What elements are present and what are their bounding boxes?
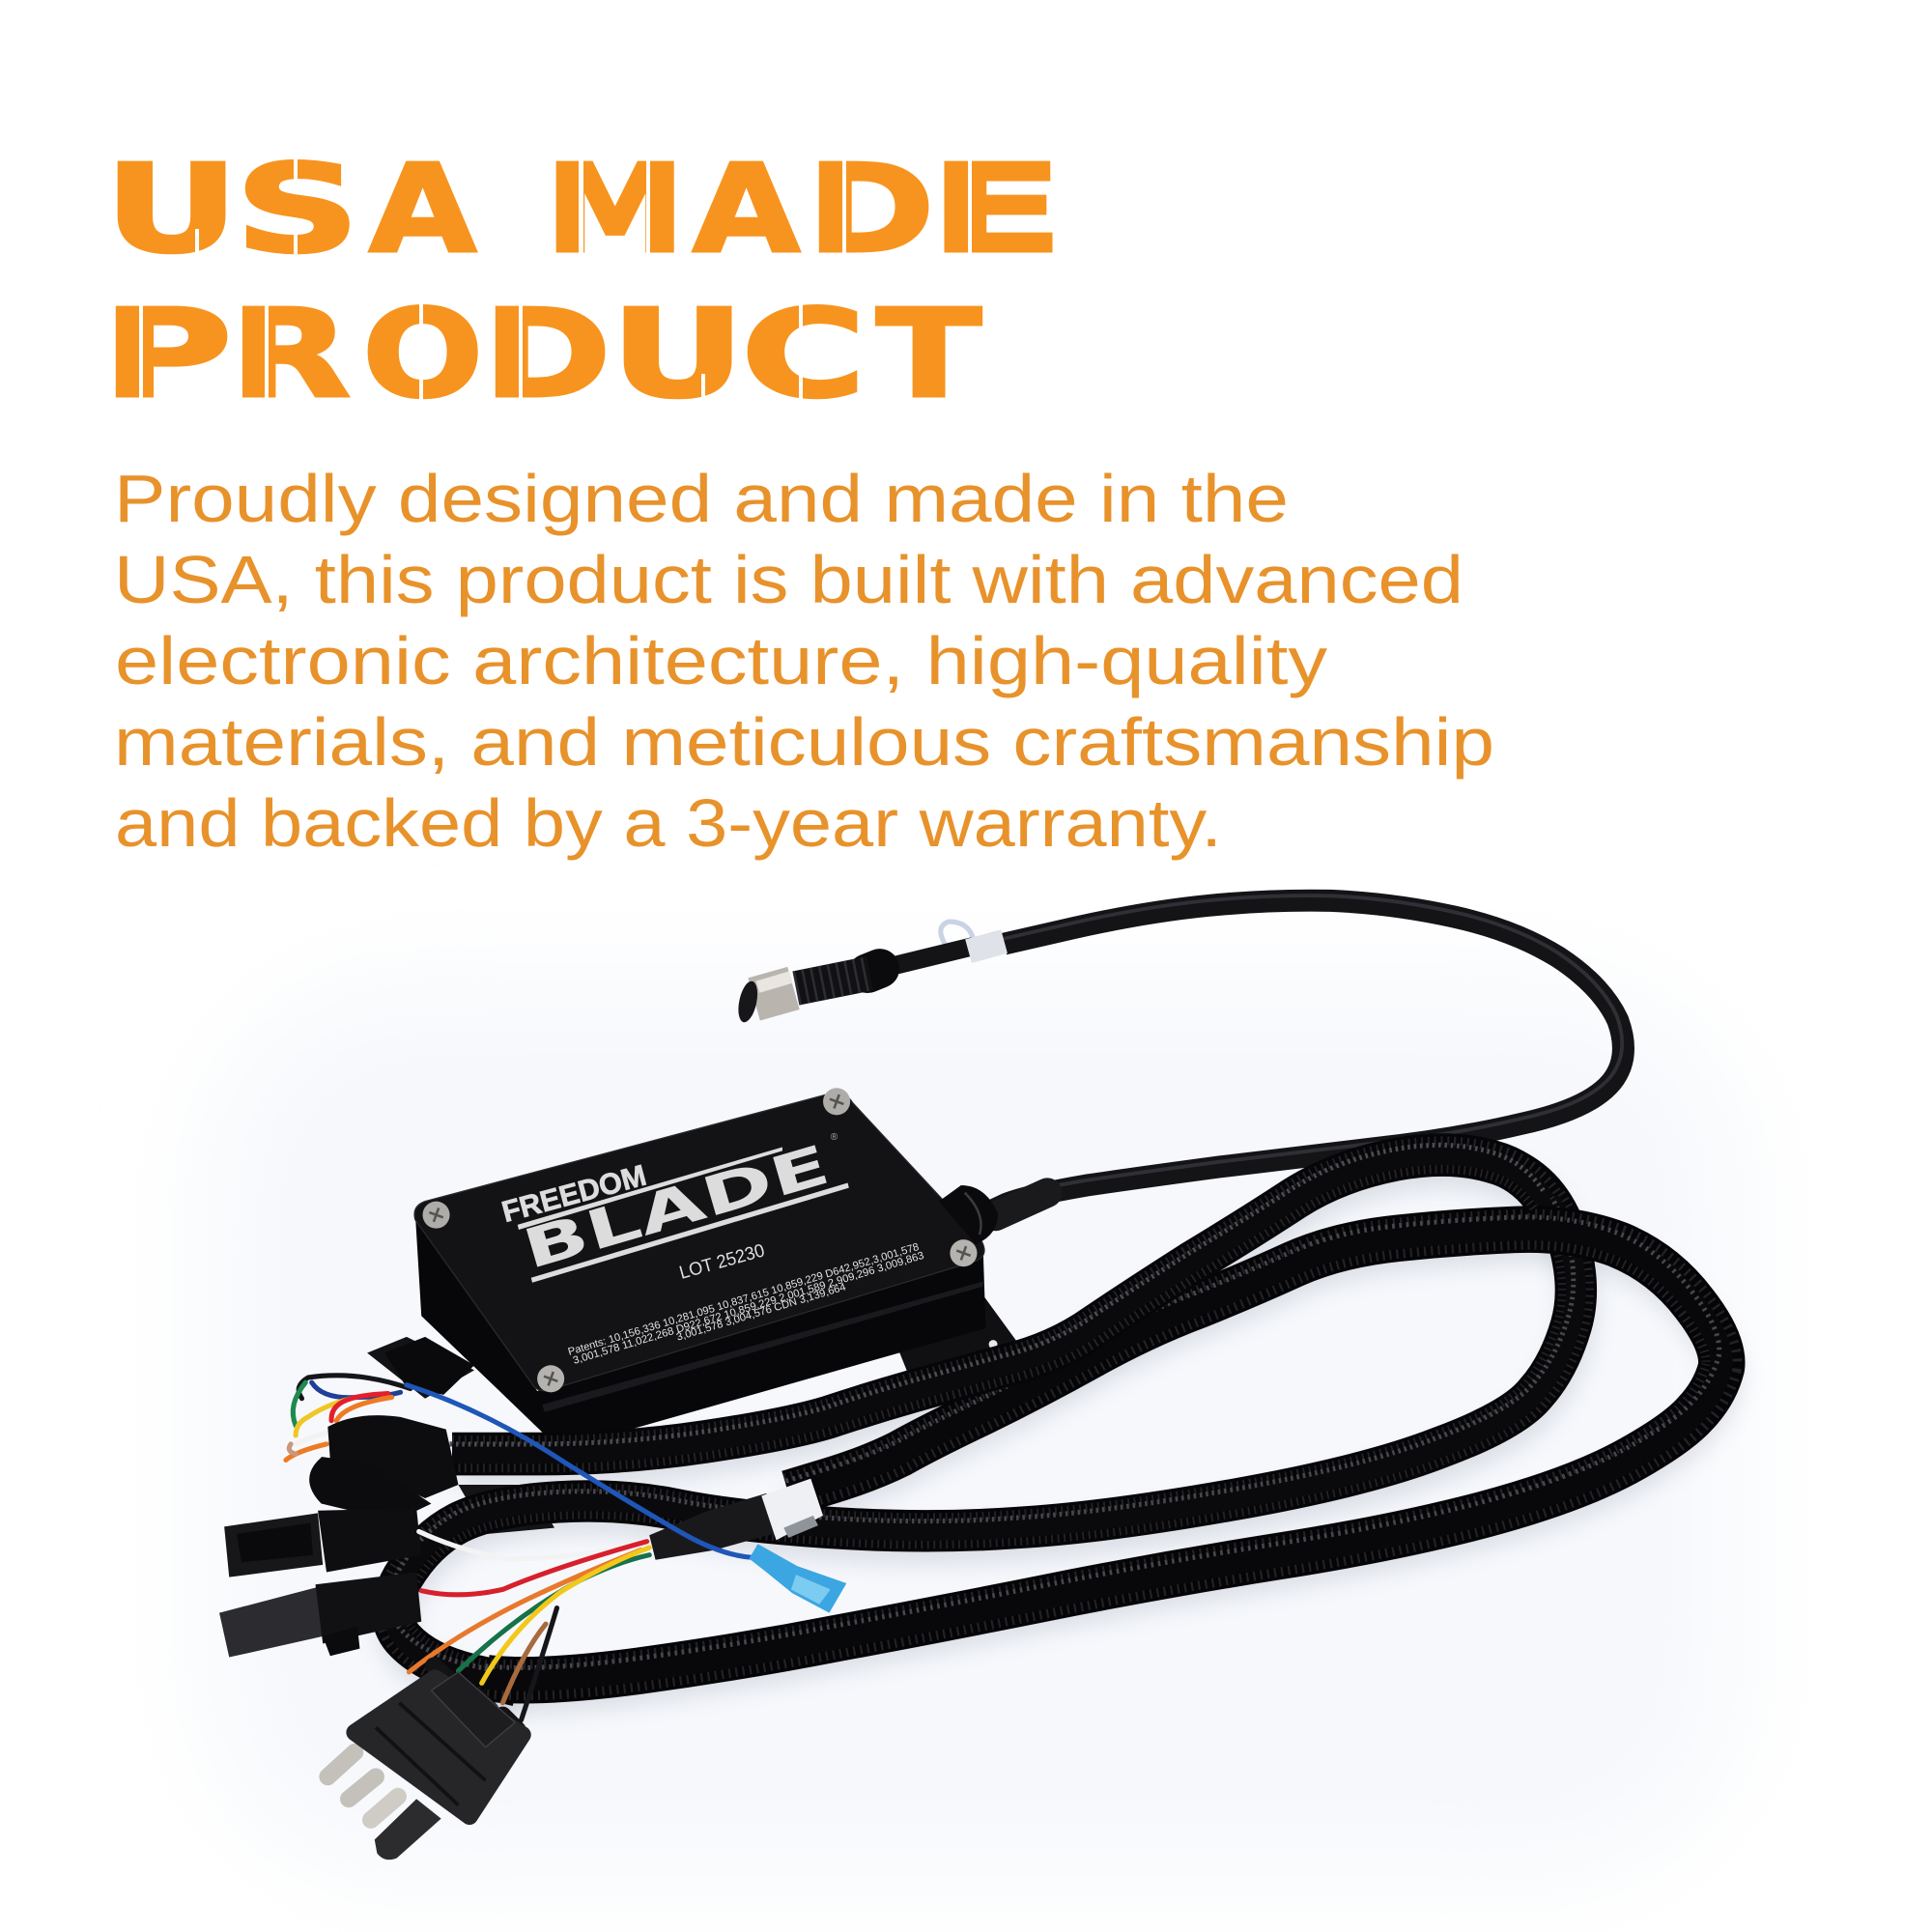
logo: Freedom Blade xyxy=(498,1132,849,1283)
heading line 1: A xyxy=(693,138,800,280)
heading line 2: C xyxy=(741,283,866,425)
heading line 1 xyxy=(104,138,1065,280)
body paragraph xyxy=(114,461,1494,861)
body paragraph: electronic architecture, high-quality xyxy=(115,623,1327,698)
screws xyxy=(423,1088,977,1392)
wire fan to harness xyxy=(409,1531,649,1720)
heading line 2: U xyxy=(611,283,745,425)
silver collar xyxy=(754,988,793,999)
body paragraph: Proudly designed and made in the xyxy=(114,461,1289,536)
wire nubs xyxy=(434,1665,518,1730)
metal pins xyxy=(327,1752,398,1820)
logo: Freedom Blade: BLADE xyxy=(516,1134,837,1282)
black enclosure xyxy=(384,1088,1047,1444)
logo: Freedom Blade: FREEDOM xyxy=(498,1159,650,1229)
coloured wires at connector cluster xyxy=(286,1376,411,1460)
heading line 2: T xyxy=(876,283,981,425)
heading line 1: S xyxy=(235,138,360,280)
silver band xyxy=(969,941,1005,952)
heading line 2: P xyxy=(101,283,233,425)
heading line 1: D xyxy=(807,138,935,280)
left cable gland xyxy=(384,1337,474,1395)
corrugated harness: large loop xyxy=(484,1217,1721,1680)
heading line 2: D xyxy=(483,283,611,425)
logo: Freedom Blade: ® xyxy=(831,1132,838,1143)
black heat-shrink boot xyxy=(327,1415,458,1498)
lot number: LOT 25230 xyxy=(677,1240,767,1284)
two black pigtail connectors xyxy=(219,1508,421,1658)
patent numbers: 3,001,578 11,022,268 D922,672 10,859,229 2,001,589 2,909,296 3,009,863 xyxy=(572,1250,925,1367)
heading line 1: E xyxy=(928,138,1065,280)
heading line 2 xyxy=(101,283,983,425)
heading line 1: U xyxy=(104,138,239,280)
connector: upper xyxy=(224,1508,421,1577)
heading line 2: O xyxy=(362,283,483,425)
heading line 1: A xyxy=(369,138,476,280)
body paragraph: USA, this product is built with advanced xyxy=(114,542,1463,617)
blue wire with spade terminal xyxy=(407,1385,846,1613)
corrugated harness: upper arm overlap xyxy=(450,1145,1547,1454)
strain relief and ribbed connector xyxy=(867,969,880,974)
corrugated harness: top loop xyxy=(390,1145,1576,1686)
heat shrink and silver label xyxy=(649,1479,823,1560)
thin black cable with round connector xyxy=(735,895,1623,1213)
cable tag loop xyxy=(941,922,974,947)
heading line 2: R xyxy=(230,283,351,425)
enclosure top plate xyxy=(414,1094,984,1391)
patent numbers: Patents: 10,156,336 10,281,095 10,837,615 10,859,229 D642,952,3,001,578 xyxy=(567,1241,921,1358)
photo background glow xyxy=(210,985,1737,1873)
black wires and clip under boot xyxy=(312,1460,425,1518)
right cable gland xyxy=(939,1185,1047,1244)
heading line 1: M xyxy=(545,138,685,280)
patent numbers: 3,001,578 3,004,576 CDN 3,139,664 xyxy=(675,1281,847,1344)
connector: lower xyxy=(219,1573,421,1658)
body paragraph: materials, and meticulous craftsmanship xyxy=(114,704,1494,780)
trailer plug xyxy=(327,1665,523,1860)
enclosure flanges xyxy=(367,1293,1025,1534)
body paragraph: and backed by a 3-year warranty. xyxy=(115,785,1222,861)
